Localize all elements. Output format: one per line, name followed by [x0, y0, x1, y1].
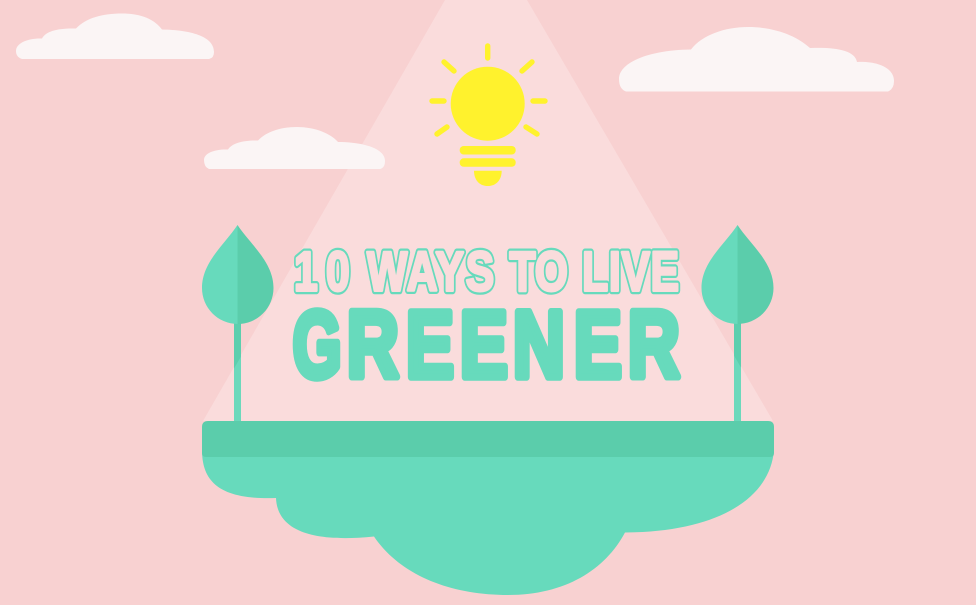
heading: 10 ways to live: TO — [510, 240, 568, 303]
heading: 10 ways to live — [294, 240, 680, 303]
heading: greener: REENER — [347, 292, 680, 398]
heading: 10 ways to live: 10 — [294, 240, 350, 303]
icon: light bulb — [432, 46, 545, 186]
cloud: top left — [16, 14, 214, 59]
heading: 10 ways to live: LIVE — [582, 240, 680, 303]
cloud: top right — [619, 27, 894, 92]
heading: 10 ways to live: 10 — [294, 240, 350, 303]
heading: 10 ways to live: WAYS — [367, 240, 496, 303]
island: floating ground body — [202, 450, 774, 595]
tree: right — [702, 225, 774, 422]
heading: 10 ways to live: WAYS — [367, 240, 496, 303]
heading: 10 ways to live: TO — [510, 240, 568, 303]
heading: greener: G — [293, 292, 342, 398]
light beam — [203, 0, 773, 421]
cloud: middle left — [204, 127, 385, 169]
heading: 10 ways to live: LIVE — [582, 240, 680, 303]
tree: left — [202, 225, 274, 422]
island: grass platform — [202, 421, 774, 457]
